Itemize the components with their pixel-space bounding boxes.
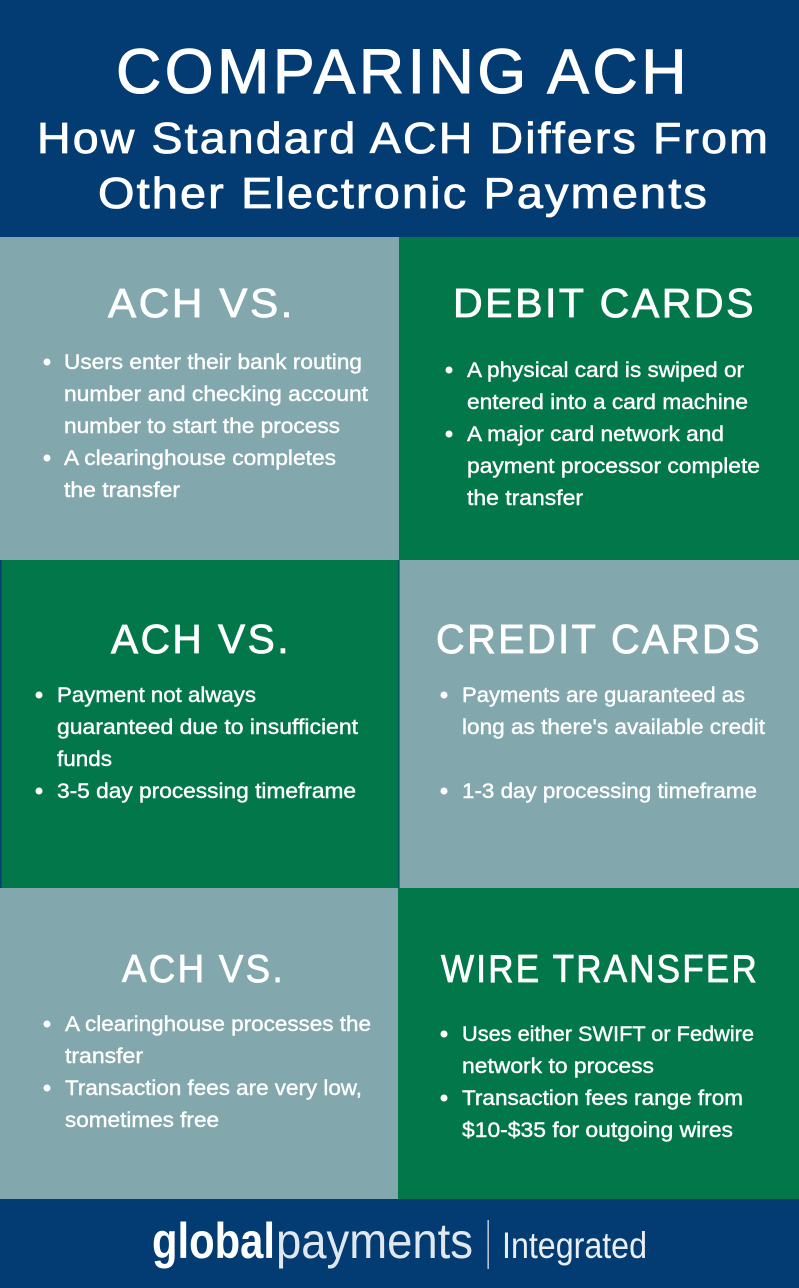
bullet list: A clearinghouse completes bbox=[64, 447, 336, 470]
subtitle: Other Electronic Payments bbox=[98, 169, 709, 218]
bullet list: $10-$35 for outgoing wires bbox=[462, 1119, 733, 1142]
bullet list: 1-3 day processing timeframe bbox=[462, 780, 757, 803]
logo: global payments Integrated: global bbox=[152, 1213, 275, 1269]
heading: DEBIT CARDS bbox=[453, 280, 756, 326]
bullet list: the transfer bbox=[64, 479, 180, 502]
bullet list: Uses either SWIFT or Fedwire bbox=[462, 1023, 754, 1046]
bullet list bbox=[440, 1023, 754, 1142]
title: COMPARING ACH bbox=[116, 37, 690, 107]
panel: debit cards bbox=[399, 237, 799, 560]
bullet list: funds bbox=[57, 748, 112, 771]
footer band bbox=[0, 1199, 799, 1288]
bullet list bbox=[36, 684, 358, 803]
bullet list: long as there's available credit bbox=[462, 716, 765, 739]
bullet list bbox=[44, 351, 368, 502]
bullet list bbox=[440, 684, 765, 803]
bullet list: network to process bbox=[462, 1055, 654, 1078]
heading: ACH VS. bbox=[122, 948, 285, 991]
bullet list: transfer bbox=[65, 1045, 143, 1068]
bullet list: the transfer bbox=[467, 487, 583, 510]
panel: ACH vs credit cards, ACH side bbox=[0, 560, 400, 888]
heading: CREDIT CARDS bbox=[436, 616, 762, 662]
bullet list: Payments are guaranteed as bbox=[462, 684, 745, 707]
bullet list: entered into a card machine bbox=[467, 391, 748, 414]
header band bbox=[0, 0, 799, 237]
logo: global payments Integrated: payments bbox=[276, 1213, 473, 1269]
bullet list: guaranteed due to insufficient bbox=[57, 716, 358, 739]
heading: WIRE TRANSFER bbox=[441, 948, 759, 991]
subtitle bbox=[37, 114, 770, 218]
panel: ACH vs debit cards, ACH side bbox=[0, 237, 399, 560]
bullet list: sometimes free bbox=[65, 1109, 219, 1132]
heading: ACH VS. bbox=[111, 616, 291, 662]
bullet list bbox=[44, 1013, 371, 1132]
bullet list: 3-5 day processing timeframe bbox=[57, 780, 356, 803]
bullet list: payment processor complete bbox=[467, 455, 760, 478]
bullet list: number and checking account bbox=[64, 383, 368, 406]
panel: ACH vs wire transfer, ACH side bbox=[0, 888, 398, 1199]
bullet list bbox=[446, 359, 760, 510]
bullet list: A clearinghouse processes the bbox=[65, 1013, 371, 1036]
bullet list: Transaction fees range from bbox=[462, 1087, 743, 1110]
panel: credit cards bbox=[400, 560, 799, 888]
logo: global payments Integrated bbox=[152, 1213, 647, 1269]
bullet list: Transaction fees are very low, bbox=[65, 1077, 362, 1100]
bullet list: Users enter their bank routing bbox=[64, 351, 362, 374]
logo: global payments Integrated: Integrated bbox=[502, 1225, 647, 1266]
bullet list: Payment not always bbox=[57, 684, 256, 707]
heading: ACH VS. bbox=[108, 280, 295, 326]
bullet list: number to start the process bbox=[64, 415, 340, 438]
panel: wire transfer bbox=[398, 888, 799, 1199]
subtitle: How Standard ACH Differs From bbox=[37, 114, 770, 163]
bullet list: A major card network and bbox=[467, 423, 724, 446]
bullet list: A physical card is swiped or bbox=[467, 359, 744, 382]
